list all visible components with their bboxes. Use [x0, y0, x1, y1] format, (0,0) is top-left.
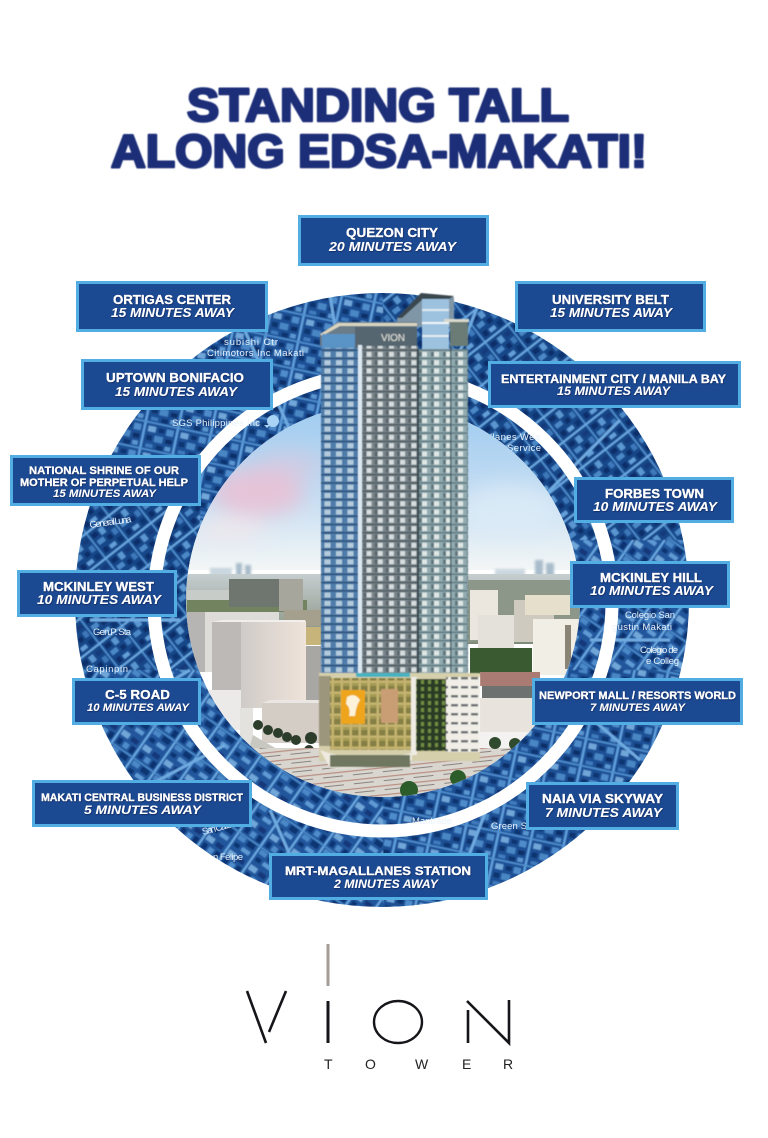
street and trees left — [250, 720, 317, 780]
label: McKinley West — [18, 572, 176, 616]
label: MRT-Magallanes Station: 2 MINUTES AWAY — [333, 877, 439, 891]
label: Newport Mall / Resorts World — [534, 680, 742, 724]
map place labels — [86, 337, 679, 863]
label: McKinley Hill — [572, 562, 728, 606]
map place labels: Service — [507, 443, 541, 454]
central tower wing — [362, 346, 418, 674]
label: MRT-Magallanes Station: MRT-MAGALLANES STATION — [285, 864, 471, 878]
tower — [319, 293, 480, 768]
title — [111, 79, 647, 177]
label: National Shrine — [12, 456, 200, 504]
billboard: yellow — [341, 690, 365, 724]
map place labels: San Carlos — [201, 818, 237, 838]
logo: O — [374, 1001, 422, 1043]
label: Uptown Bonifacio — [82, 360, 272, 408]
left tower wing — [321, 348, 359, 674]
white ring road — [154, 373, 612, 831]
map place labels: General Luna — [89, 514, 133, 531]
label: University Belt: 15 MINUTES AWAY — [550, 305, 673, 320]
label: National Shrine: MOTHER OF PERPETUAL HELP — [20, 477, 188, 489]
label: Newport Mall / Resorts World: NEWPORT MALL / RESORTS WORLD — [539, 690, 736, 702]
label: C-5 Road: 10 MINUTES AWAY — [87, 702, 191, 714]
map place labels: Colegio de — [640, 645, 678, 656]
rooftop crown — [397, 293, 469, 351]
logo: V — [247, 991, 286, 1043]
right tower wing — [418, 349, 468, 674]
logo: I — [326, 1001, 330, 1043]
label: Entertainment City / Manila Bay: 15 MINUTES AWAY — [557, 384, 671, 398]
label: Ortigas Center: ORTIGAS CENTER — [113, 292, 232, 307]
map place labels: Citimotors Inc Makati — [207, 348, 304, 359]
title: STANDING TALL — [187, 79, 569, 131]
billboard: portrait — [381, 689, 398, 723]
elevated rail foreground — [253, 737, 520, 797]
label: University Belt: UNIVERSITY BELT — [552, 292, 669, 307]
map place labels: n Felipe — [213, 852, 243, 863]
upper facade with sign: VION — [381, 333, 405, 344]
logo: TOWER: TOWER — [324, 1056, 513, 1072]
map place labels: SGS Philippines Inc — [172, 418, 260, 429]
label: Entertainment City / Manila Bay: ENTERTAINMENT CITY / MANILA BAY — [501, 372, 726, 386]
label: University Belt — [516, 282, 704, 330]
label: Quezon City — [300, 216, 488, 264]
label: Makati Central Business District: 5 MINUTES AWAY — [84, 803, 202, 817]
inner photo scene — [180, 400, 590, 808]
map place labels: Gen.P. Sta — [93, 627, 132, 638]
label: Uptown Bonifacio: 15 MINUTES AWAY — [115, 384, 238, 399]
label: Newport Mall / Resorts World: 7 MINUTES AWAY — [590, 702, 687, 714]
map place labels: Green S — [491, 821, 527, 832]
label: Entertainment City / Manila Bay — [490, 362, 740, 406]
map place labels: subishi Ctr — [224, 337, 278, 348]
label: McKinley West: 10 MINUTES AWAY — [37, 592, 162, 607]
map place labels: gustin Makati — [612, 622, 672, 633]
label: NAIA via Skyway: NAIA VIA SKYWAY — [542, 791, 663, 806]
map place labels: Capinpin — [86, 664, 128, 675]
label: Quezon City: QUEZON CITY — [346, 225, 438, 240]
mid buildings left — [229, 579, 322, 645]
upper facade with sign — [320, 322, 417, 354]
map place labels: Colegio San — [625, 610, 675, 621]
label: Ortigas Center: 15 MINUTES AWAY — [111, 305, 235, 320]
city ground — [180, 574, 590, 644]
map place labels: e Colleg — [646, 656, 679, 667]
label: Ortigas Center — [78, 282, 266, 330]
label: Uptown Bonifacio: UPTOWN BONIFACIO — [106, 370, 244, 385]
distant skyline — [209, 558, 556, 574]
label: McKinley Hill: 10 MINUTES AWAY — [590, 583, 714, 598]
label: National Shrine: NATIONAL SHRINE OF OUR — [29, 465, 179, 477]
sky — [188, 413, 576, 570]
label: McKinley West: MCKINLEY WEST — [43, 579, 154, 594]
dark recess — [417, 349, 419, 674]
title: ALONG EDSA-MAKATI! — [111, 125, 647, 177]
map pin — [264, 415, 279, 428]
low station building right — [480, 672, 540, 748]
label: NAIA via Skyway: 7 MINUTES AWAY — [545, 805, 663, 820]
podium — [319, 673, 480, 768]
label: Forbes Town: 10 MINUTES AWAY — [593, 499, 718, 514]
label: Quezon City: 20 MINUTES AWAY — [328, 239, 457, 254]
Vion Tower logo — [247, 944, 513, 1072]
white vertical fin — [358, 345, 362, 674]
label: Makati Central Business District — [34, 782, 250, 826]
grey massing blocks — [187, 612, 321, 744]
label: MRT-Magallanes Station — [270, 854, 486, 898]
map place labels: Mantrade — [412, 816, 452, 827]
logo: grey accent bar — [326, 944, 330, 986]
label: NAIA via Skyway — [528, 784, 678, 828]
label: Forbes Town: FORBES TOWN — [605, 486, 704, 501]
label: McKinley Hill: MCKINLEY HILL — [600, 570, 702, 585]
map ring — [70, 285, 703, 920]
logo: N — [467, 1000, 509, 1043]
label: Makati Central Business District: MAKATI CENTRAL BUSINESS DISTRICT — [41, 792, 243, 804]
map place labels: llanes Wea — [490, 432, 541, 443]
label: C-5 Road: C-5 ROAD — [105, 687, 170, 702]
label: Forbes Town — [576, 478, 732, 522]
white city buildings right — [468, 580, 588, 675]
label: C-5 Road — [74, 680, 200, 724]
label: National Shrine: 15 MINUTES AWAY — [53, 488, 158, 500]
pink clouds — [194, 451, 560, 542]
